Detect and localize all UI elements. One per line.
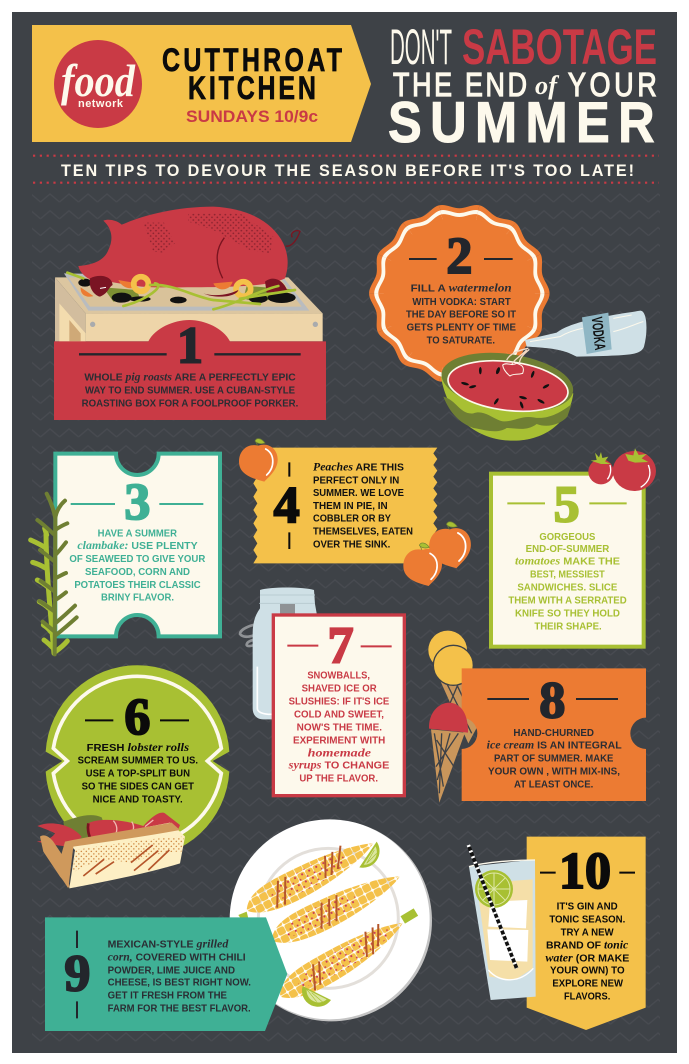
- subtitle: TEN TIPS TO DEVOUR THE SEASON BEFORE IT'S TOO LATE!: [61, 162, 634, 180]
- panel: tip 5 tomatoes: [491, 448, 656, 647]
- icon: ice cream cones: [428, 631, 477, 743]
- icon: mason jar: [240, 587, 320, 719]
- text: tip 4: OVER THE SINK.: [313, 540, 391, 551]
- card: [491, 474, 644, 647]
- text: tip 7: SNOWBALLS,: [307, 671, 370, 682]
- text: tip 7: SLUSHIES: IF IT'S ICE: [289, 697, 390, 708]
- text: tip 5: THEM WITH A SERRATED: [508, 596, 627, 607]
- number 3: 3: [124, 474, 150, 531]
- text: tip 3: HAVE A SUMMER: [98, 529, 177, 540]
- number 1: 1: [177, 317, 203, 374]
- text: tip 10: TRY A NEW: [561, 928, 614, 939]
- garnishes: [67, 273, 296, 309]
- text: tip 8: AT LEAST ONCE.: [514, 780, 594, 791]
- text: tip 9: GET IT FRESH FROM THE: [108, 991, 227, 1002]
- text: tip 2: WITH VODKA: START: [412, 297, 511, 308]
- text: tip 1: WAY TO END SUMMER. USE A CUBAN-STYLE: [85, 386, 295, 397]
- text: tip 4: THEM IN PIE, IN: [313, 501, 388, 512]
- icon: watermelon: [438, 345, 577, 441]
- text: tip 4: THEMSELVES, EATEN: [313, 527, 413, 538]
- title: of: [535, 71, 559, 100]
- number 4: 4: [274, 477, 300, 534]
- text: tip 8: PART OF SUMMER. MAKE: [494, 754, 614, 765]
- text: tip 9: POWDER, LIME JUICE AND: [108, 965, 235, 976]
- text: tip 9: [108, 939, 251, 1015]
- text: tip 5: THEIR SHAPE.: [534, 622, 602, 633]
- header banner: Cutthroat Kitchen: [32, 25, 371, 142]
- text: tip 10: [545, 902, 630, 1003]
- text: tip 3: BRINY FLAVOR.: [101, 593, 174, 604]
- text: tip 1: WHOLE pig roasts ARE A PERFECTLY EPIC: [84, 371, 296, 383]
- text: tip 7: COLD AND SWEET,: [294, 710, 384, 721]
- text: tip 5: tomatoes MAKE THE: [515, 556, 620, 568]
- text: tip 6: USE A TOP-SPLIT BUN: [86, 769, 190, 780]
- text: tip 1: [82, 371, 299, 410]
- text: tip 9: MEXICAN-STYLE grilled: [108, 939, 229, 951]
- number 2: 2: [446, 228, 472, 285]
- text: tip 7: UP THE FLAVOR.: [299, 774, 378, 785]
- text: tip 10: IT'S GIN AND: [557, 902, 618, 913]
- text: tip 7: EXPERIMENT WITH: [293, 736, 385, 747]
- icon: vodka bottle: [503, 311, 646, 376]
- title: YOUR: [568, 67, 657, 104]
- text: tip 10: water (OR MAKE: [545, 953, 630, 965]
- text: tip 8: [487, 728, 622, 791]
- text: tip 2: FILL A watermelon: [411, 283, 512, 295]
- text: tip 10: YOUR OWN) TO: [550, 966, 625, 977]
- ticket: [462, 668, 646, 801]
- panel: tip 7 snowballs: [273, 615, 404, 796]
- icon: seaweed sprig: [31, 494, 77, 654]
- number 5: 5: [554, 477, 580, 534]
- yellow arrow banner: [32, 25, 371, 142]
- text: tip 7: NOW'S THE TIME.: [297, 723, 382, 734]
- icon: grilled corn cobs: [238, 830, 418, 1010]
- title: [388, 19, 657, 155]
- text: tip 6: [78, 742, 198, 806]
- panel: tip 2 watermelon: [361, 197, 646, 441]
- panel: tip 9 grilled corn: [45, 819, 432, 1031]
- text: tip 5: SANDWICHES. SLICE: [517, 583, 618, 594]
- show time: SUNDAYS 10/9c: [186, 107, 318, 126]
- icon: lobster roll: [37, 813, 185, 888]
- show title: [162, 43, 342, 107]
- text: tip 4: COBBLER OR BY: [313, 514, 391, 525]
- panel: tip 1 pig roast: [54, 207, 326, 420]
- pig: [78, 207, 300, 287]
- text: tip 10: TONIC SEASON.: [549, 915, 626, 926]
- text: tip 10: FLAVORS.: [564, 992, 611, 1003]
- text: tip 9: CHEESE, IS BEST RIGHT NOW.: [108, 978, 251, 989]
- round badge: [46, 665, 229, 858]
- number 6: 6: [124, 689, 150, 746]
- teal arrow panel: [45, 917, 287, 1031]
- text: tip 2: GETS PLENTY OF TIME: [407, 323, 516, 334]
- icon: lime wedges: [302, 842, 380, 1007]
- panel: tip 10 gin and tonic: [468, 837, 646, 1030]
- logo: food network: food: [61, 55, 136, 106]
- icon: peach pair: [403, 522, 471, 586]
- text: tip 8: ice cream IS AN INTEGRAL: [487, 740, 622, 752]
- title: THE END: [393, 67, 527, 104]
- icon: plate: [230, 819, 432, 1021]
- logo: food network: [54, 40, 142, 128]
- icon: vodka bottle: VODKA: [588, 316, 608, 351]
- text: tip 4: Peaches ARE THIS: [313, 462, 404, 474]
- text: tip 5: KNIFE SO THEY HOLD: [515, 609, 620, 620]
- text: tip 6: SCREAM SUMMER TO US.: [78, 756, 198, 767]
- text: tip 6: NICE AND TOASTY.: [93, 795, 183, 806]
- number 10: 10: [559, 843, 611, 900]
- icon: gin and tonic glass: [468, 845, 536, 1000]
- title: DON'T: [390, 19, 452, 75]
- icon: tomatoes: [588, 448, 656, 491]
- show title: CUTTHROAT: [162, 43, 342, 79]
- text: tip 9: FARM FOR THE BEST FLAVOR.: [108, 1004, 251, 1015]
- text: tip 5: END-OF-SUMMER: [526, 544, 609, 555]
- text: tip 10: BRAND OF tonic: [546, 940, 628, 952]
- text: tip 2: TO SATURATE.: [427, 335, 495, 346]
- logo: food network: network: [78, 98, 124, 110]
- panel: tip 4 peaches: [239, 439, 437, 563]
- red text panel: [54, 320, 326, 420]
- number 7: 7: [328, 617, 354, 674]
- zigzag yellow banner: [253, 448, 437, 563]
- ticket card: [55, 454, 220, 636]
- text: tip 3: clambake: USE PLENTY: [77, 540, 198, 552]
- number 9: 9: [64, 946, 90, 1003]
- text: tip 4: SUMMER. WE LOVE: [313, 488, 404, 499]
- text: tip 1: ROASTING BOX FOR A FOOLPROOF PORKER.: [82, 399, 299, 410]
- text: tip 4: PERFECT ONLY IN: [313, 476, 399, 487]
- text: tip 10: EXPLORE NEW: [552, 979, 624, 990]
- text: tip 2: THE DAY BEFORE SO IT: [406, 310, 516, 321]
- text: tip 9: corn, COVERED WITH CHILI: [108, 951, 246, 963]
- text: tip 3: SEAFOOD, CORN AND: [85, 567, 190, 578]
- panel: tip 6 lobster rolls: [37, 665, 229, 888]
- text: tip 5: [508, 532, 627, 633]
- text: tip 5: GORGEOUS: [539, 532, 596, 543]
- text: tip 6: FRESH lobster rolls: [87, 742, 190, 754]
- text: tip 2: [406, 283, 516, 346]
- text: tip 3: OF SEAWEED TO GIVE YOUR: [69, 554, 205, 565]
- icon: red ice cream cone: [429, 703, 468, 803]
- chevron background: [32, 192, 660, 1044]
- text: tip 5: BEST, MESSIEST: [530, 570, 605, 581]
- number 8: 8: [539, 672, 565, 729]
- text: tip 3: POTATOES THEIR CLASSIC: [74, 580, 201, 591]
- title: SUMMER: [388, 91, 655, 155]
- text: tip 3: [69, 529, 205, 604]
- panel: tip 3 clambake: [31, 454, 220, 654]
- text: tip 4: [313, 462, 413, 551]
- show title: KITCHEN: [188, 71, 316, 107]
- yellow pennant: [527, 837, 646, 1030]
- text: tip 6: SO THE SIDES CAN GET: [82, 782, 194, 793]
- icon: peach: [239, 439, 278, 482]
- text: tip 8: YOUR OWN , WITH MIX-INS,: [488, 767, 620, 778]
- panel: tip 8 ice cream: [429, 668, 646, 803]
- text: tip 7: homemade: [308, 748, 371, 760]
- scalloped badge: [361, 197, 558, 390]
- card: [273, 615, 404, 796]
- text: tip 7: syrups TO CHANGE: [288, 760, 390, 772]
- roasting box: [55, 273, 323, 341]
- text: tip 7: [288, 671, 390, 785]
- text: tip 8: HAND-CHURNED: [513, 728, 594, 739]
- text: tip 7: SHAVED ICE OR: [302, 684, 377, 695]
